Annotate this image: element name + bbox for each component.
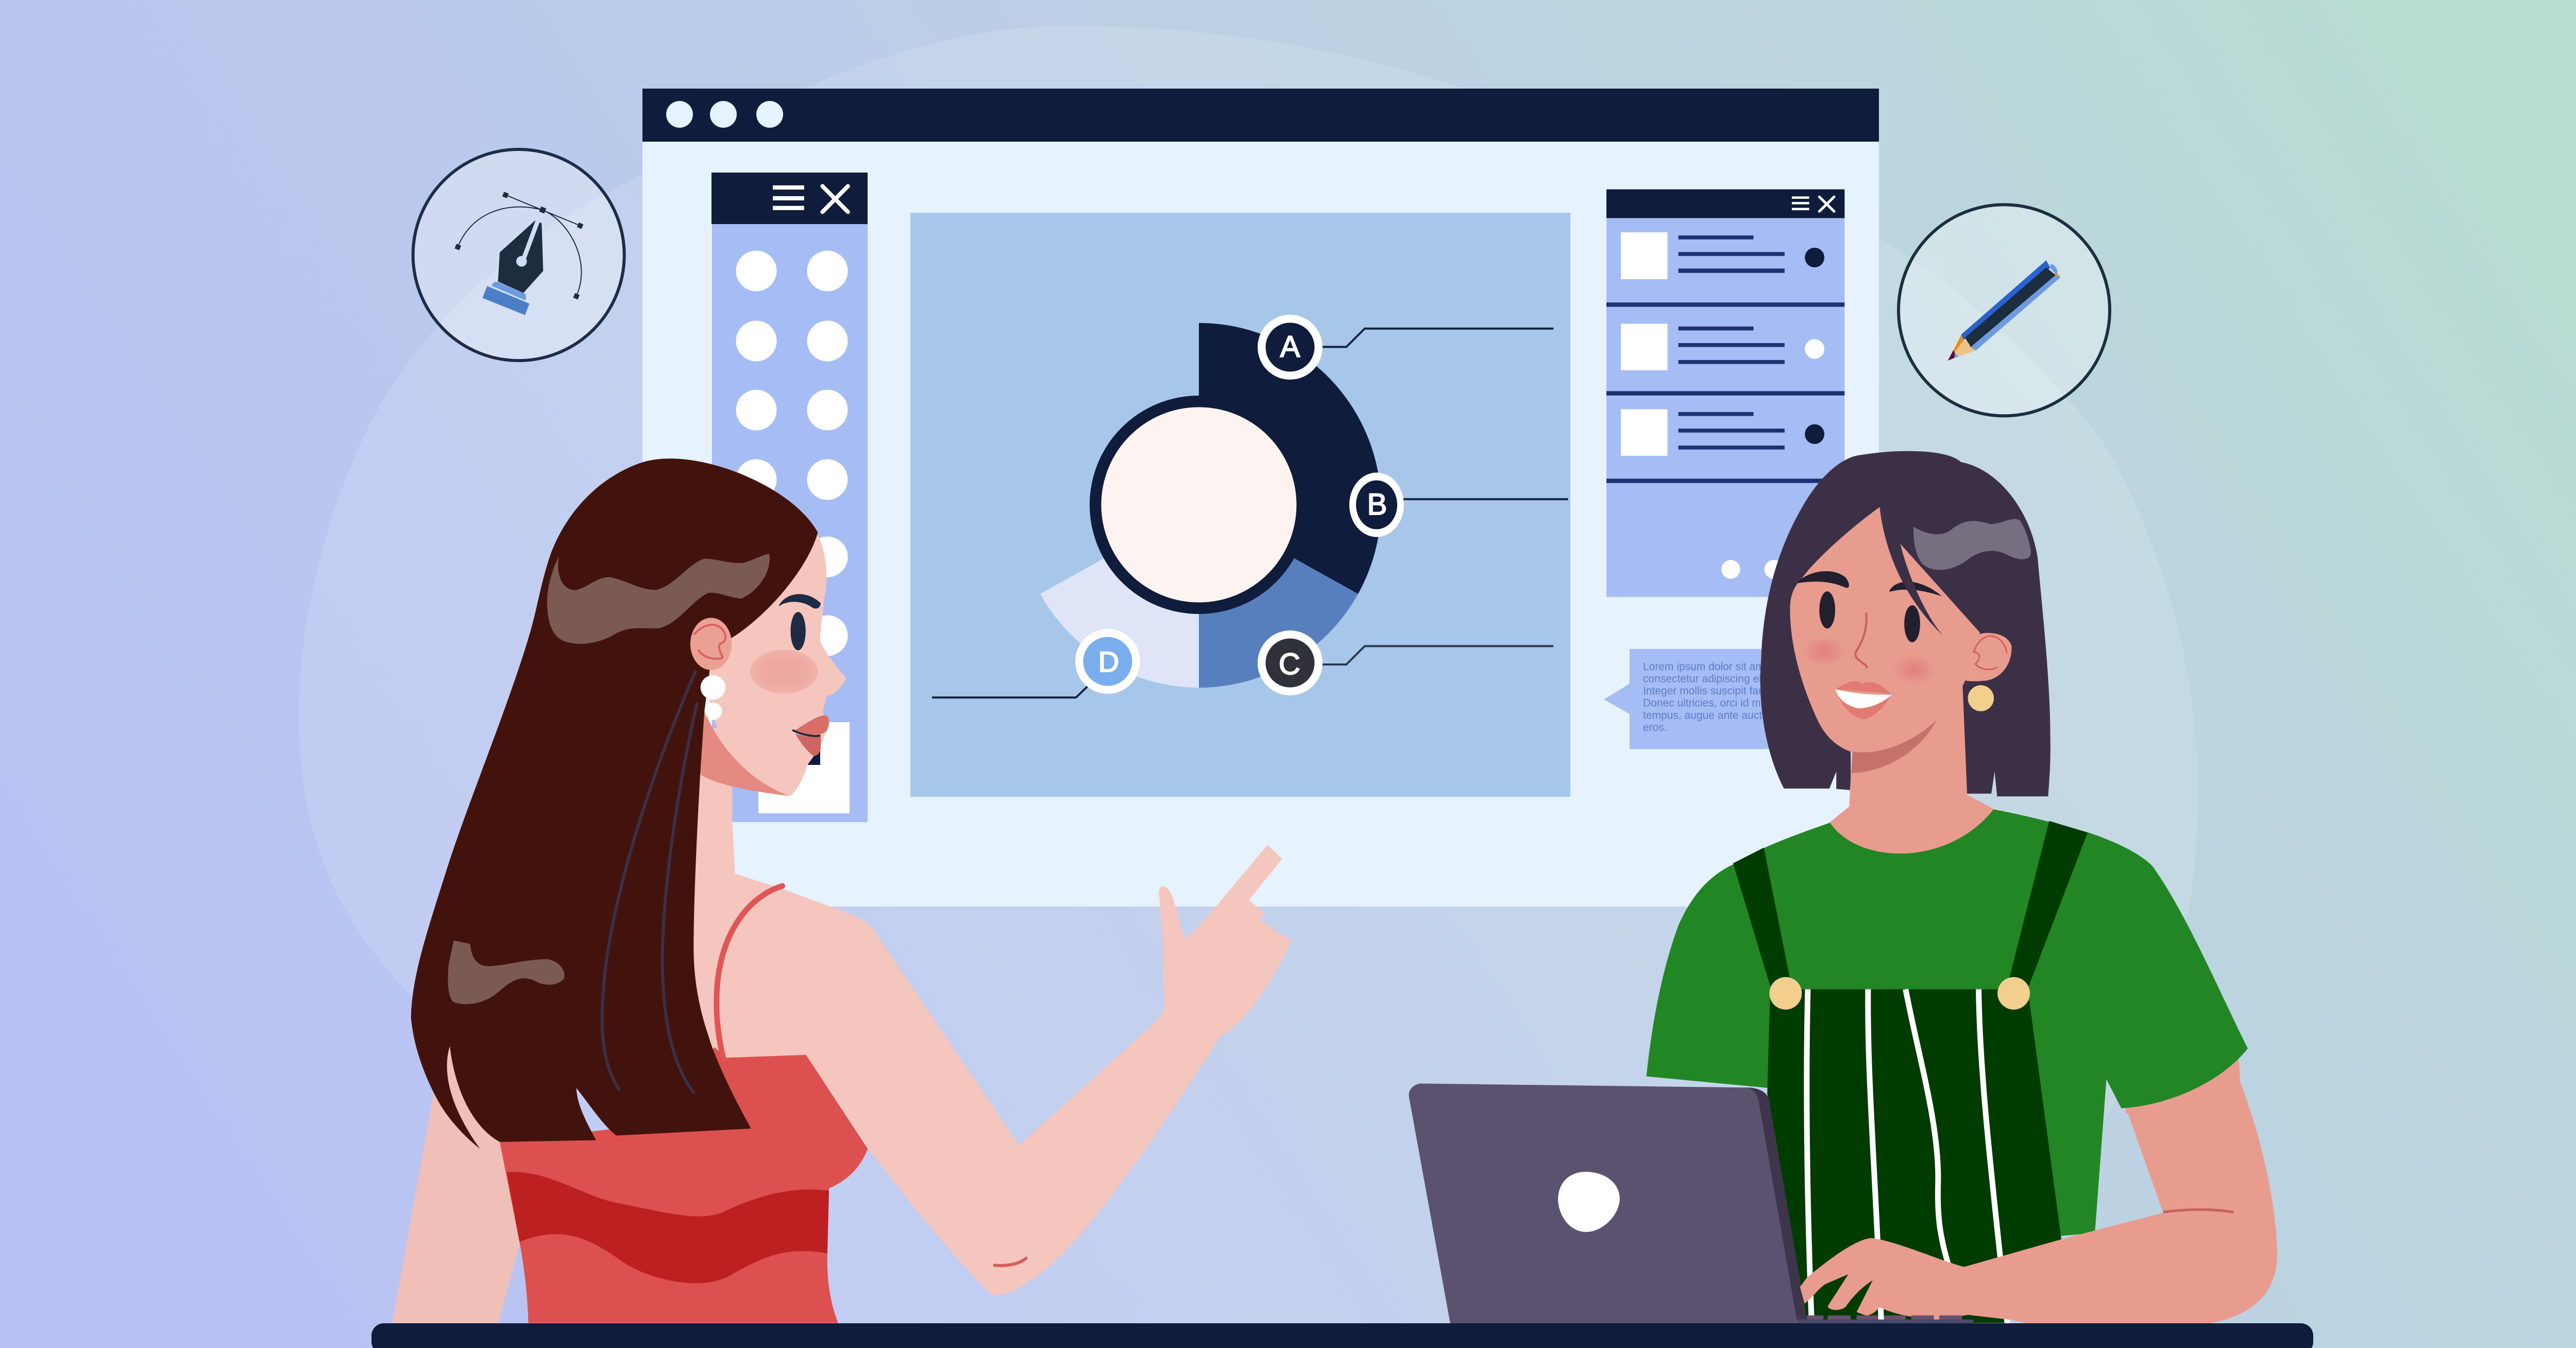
background pale blob: [299, 26, 2198, 1348]
striped overall bib: [1767, 989, 2063, 1323]
icon: pen tool: [413, 149, 624, 361]
elbow crease: [994, 1258, 1026, 1266]
typing hand: [1800, 1233, 2087, 1323]
badge D: [1075, 629, 1140, 694]
segment A and B: [1199, 323, 1381, 594]
donut ring: [1090, 396, 1308, 614]
window body: [642, 89, 1879, 907]
cheek blush right: [1892, 655, 1936, 685]
panel: chart area: [910, 213, 1570, 797]
hair highlight lower: [448, 941, 565, 1004]
bubble text: consectetur adipiscing elit.: [1643, 673, 1770, 685]
icon: menu and close: [773, 185, 848, 212]
panel: left tool palette: [711, 173, 868, 822]
list header: [1606, 190, 1844, 218]
palette header: [711, 173, 868, 224]
list row 1: [1621, 232, 1824, 279]
bubble text: Donec ultricies, orci id mollis: [1643, 697, 1780, 709]
badge D: D: [1098, 645, 1119, 678]
bubble text: Lorem ipsum dolor sit amet,: [1643, 661, 1776, 673]
donut chart: [932, 315, 1568, 697]
neck and raised arm with pointing hand: [686, 728, 1291, 1295]
badge A: [1258, 315, 1323, 380]
ear: [690, 618, 732, 670]
laptop keys: [1807, 1316, 1962, 1320]
bob hair: [1760, 451, 2050, 796]
browser window: [642, 89, 1879, 907]
bubble text: eros.: [1643, 722, 1667, 733]
window title bar: [642, 89, 1879, 142]
window control dots: [666, 101, 783, 128]
cheek blush left: [1802, 636, 1845, 667]
list row 3: [1621, 409, 1824, 456]
laptop edge: [1750, 1087, 1807, 1320]
bubble text: tempus, augue ante auctor: [1643, 710, 1772, 721]
bubble text: Integer mollis suscipit faucibus.: [1643, 685, 1793, 697]
overall buttons: [1769, 977, 2030, 1010]
eyebrows: [1797, 571, 1942, 596]
laptop lid: [1409, 1084, 1807, 1324]
eye: [790, 612, 806, 650]
overall straps: [1733, 821, 2088, 986]
segment C: [1199, 505, 1358, 688]
fringe strand: [1879, 507, 1943, 636]
nose: [1855, 613, 1867, 667]
speech bubble with lorem ipsum: [1604, 649, 1803, 749]
list pagination dots: [1721, 560, 1783, 579]
leader lines: [932, 329, 1568, 697]
laptop: [1409, 1084, 2087, 1324]
panel: right list: [1606, 190, 1844, 597]
badge A: A: [1280, 330, 1300, 364]
palette tool dots: [736, 250, 848, 656]
desk bar: [371, 1323, 2313, 1348]
elbow crease: [2163, 1209, 2234, 1212]
cheek blush: [750, 650, 818, 694]
laptop logo: [1558, 1172, 1620, 1232]
icon: pencil: [1899, 204, 2110, 416]
eyes: [1819, 591, 1920, 642]
hair highlight upper: [547, 554, 770, 644]
person: woman on the left: [392, 458, 1291, 1323]
smile: [1835, 681, 1892, 719]
chin shadow: [1852, 719, 1937, 773]
list row 2: [1621, 324, 1824, 370]
badge C: C: [1279, 647, 1300, 681]
laptop base: [1798, 1320, 1973, 1324]
ear: [1963, 633, 2012, 681]
dress dark band: [506, 1172, 829, 1283]
eyebrow: [779, 594, 821, 608]
palette swatch square: [758, 722, 850, 813]
dress: [500, 1047, 868, 1323]
arm: [1964, 1068, 2277, 1326]
long dark hair: [411, 458, 818, 1149]
icon: list menu and close: [1792, 196, 1834, 211]
upper arm under sleeve: [2123, 1047, 2240, 1114]
pearl earrings: [701, 675, 725, 720]
person: woman on the right: [1409, 451, 2277, 1326]
green t-shirt: [1647, 809, 2248, 1251]
gold earring: [1968, 685, 1994, 711]
hair strands: [602, 672, 697, 1093]
badge B: B: [1367, 488, 1387, 521]
segment D: [1040, 505, 1199, 688]
far arm: [392, 1042, 528, 1323]
hair highlight: [1913, 519, 2031, 570]
jaw shadow: [700, 711, 789, 796]
donut centre: [1101, 407, 1296, 603]
badge C: [1258, 630, 1323, 695]
dress strap: [717, 886, 783, 1058]
face: [702, 531, 846, 796]
neck: [1828, 681, 1994, 879]
lips: [793, 715, 829, 756]
badge B: [1349, 473, 1404, 537]
face: [1790, 507, 1980, 753]
